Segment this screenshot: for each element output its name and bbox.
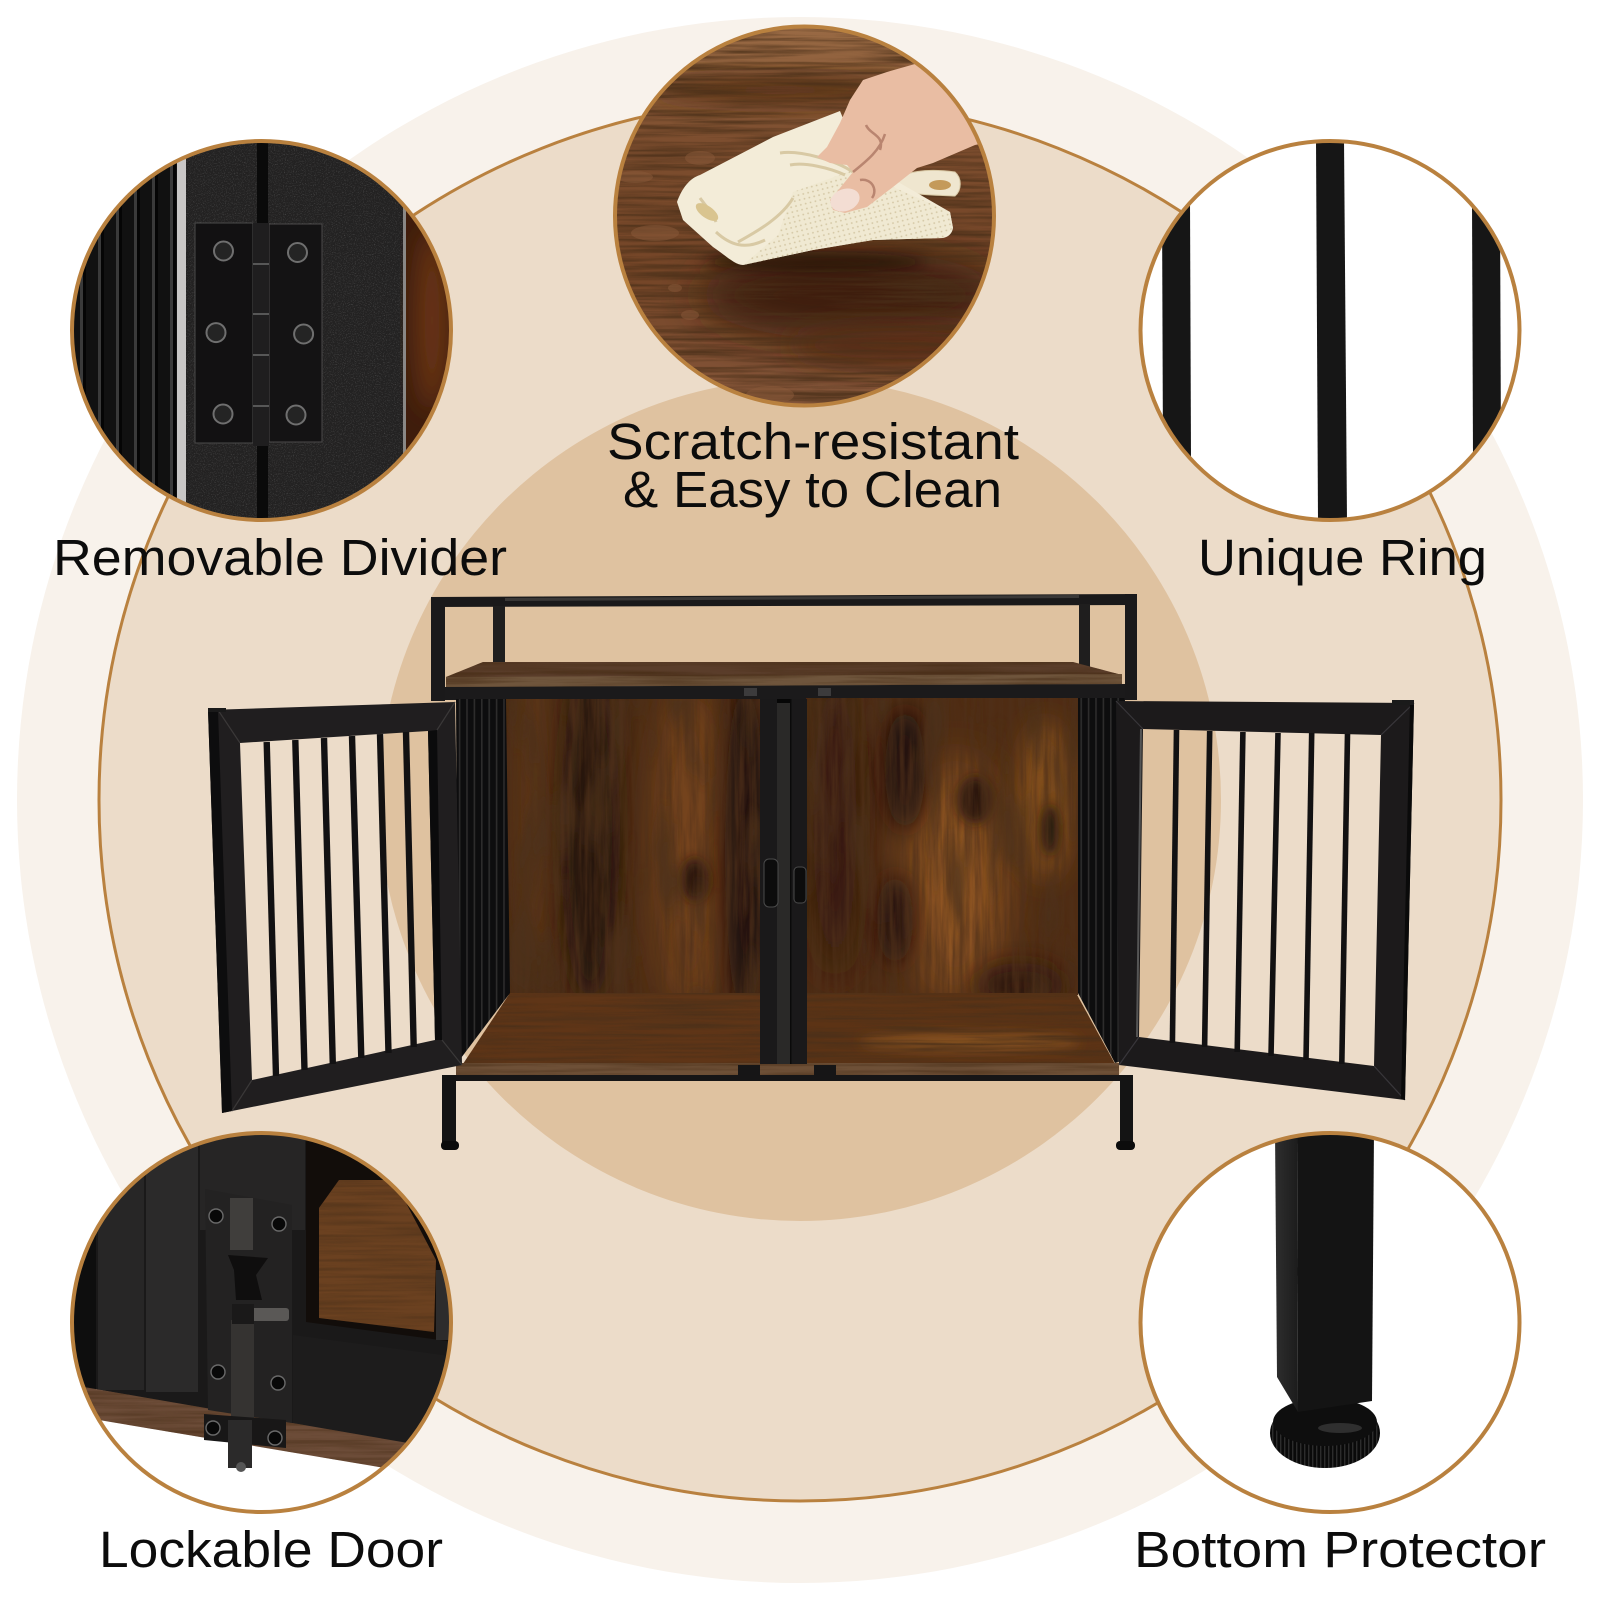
door frame corner [293, 1335, 450, 1450]
interior wood [306, 1130, 455, 1342]
floor wood panels [460, 990, 1118, 1066]
towel flap [895, 170, 960, 196]
leg side facet [1275, 1130, 1298, 1412]
label: Unique Ring: Unique Ring [1198, 529, 1487, 586]
bar right [1472, 200, 1501, 460]
hand creases [853, 125, 885, 198]
hand [817, 64, 978, 213]
label: Bottom Protector: Bottom Protector [1134, 1521, 1546, 1578]
silver strip [177, 158, 186, 502]
detail circle: adjustable foot [1140, 1130, 1520, 1512]
towel weave [743, 170, 953, 265]
bar left [1162, 200, 1191, 460]
fingernail [830, 188, 860, 212]
detail circle: lock bolt [70, 1130, 455, 1512]
water marks [617, 151, 794, 404]
back wood panel right [806, 698, 1078, 995]
centre divider posts [760, 699, 807, 1064]
metal panel [186, 139, 405, 523]
hinge plates [195, 223, 322, 446]
hinge screws [206, 242, 313, 424]
leg main [1297, 1130, 1374, 1412]
cabinet product [208, 594, 1414, 1150]
bar centre [1316, 139, 1347, 522]
detail circle: hinge [70, 139, 455, 523]
side slat panels [456, 698, 1125, 1063]
bolt screws [206, 1209, 286, 1445]
towel shadow [705, 252, 925, 272]
corrugated side [74, 164, 177, 498]
label: Removable Divider: Removable Divider [53, 529, 507, 586]
back wood panel left [506, 699, 760, 995]
bolt plate [206, 1230, 292, 1423]
wood glimpse [406, 211, 449, 450]
left door bars [267, 732, 414, 1076]
cabinet legs [441, 1075, 1135, 1150]
detail circle: bars [1140, 139, 1520, 522]
top guard rail [431, 594, 1137, 701]
label: Scratch-resistant and easy to clean: Scratch-resistant [607, 413, 1019, 470]
right door bars [1172, 730, 1348, 1064]
floor front lip [456, 1063, 1120, 1081]
foot base [1270, 1421, 1380, 1468]
towel body [677, 111, 953, 265]
middle outlined ring [99, 99, 1501, 1501]
inner tan disc [379, 379, 1221, 1221]
label: Scratch-resistant and easy to clean: & Easy to Clean [623, 461, 1002, 518]
left open door [208, 702, 462, 1113]
wood strip [84, 1387, 408, 1471]
shelf top surface [446, 662, 1122, 687]
right open door [1116, 700, 1414, 1100]
label: Lockable Door: Lockable Door [99, 1521, 443, 1578]
shelf black rail [445, 684, 1125, 700]
towel folds [700, 152, 853, 245]
dark cabinet side [96, 1140, 448, 1424]
detail circle: wiping wood with towel [612, 24, 1010, 410]
divider latches [764, 859, 806, 907]
label: Scratch-resistant and easy to clean [607, 413, 1019, 518]
